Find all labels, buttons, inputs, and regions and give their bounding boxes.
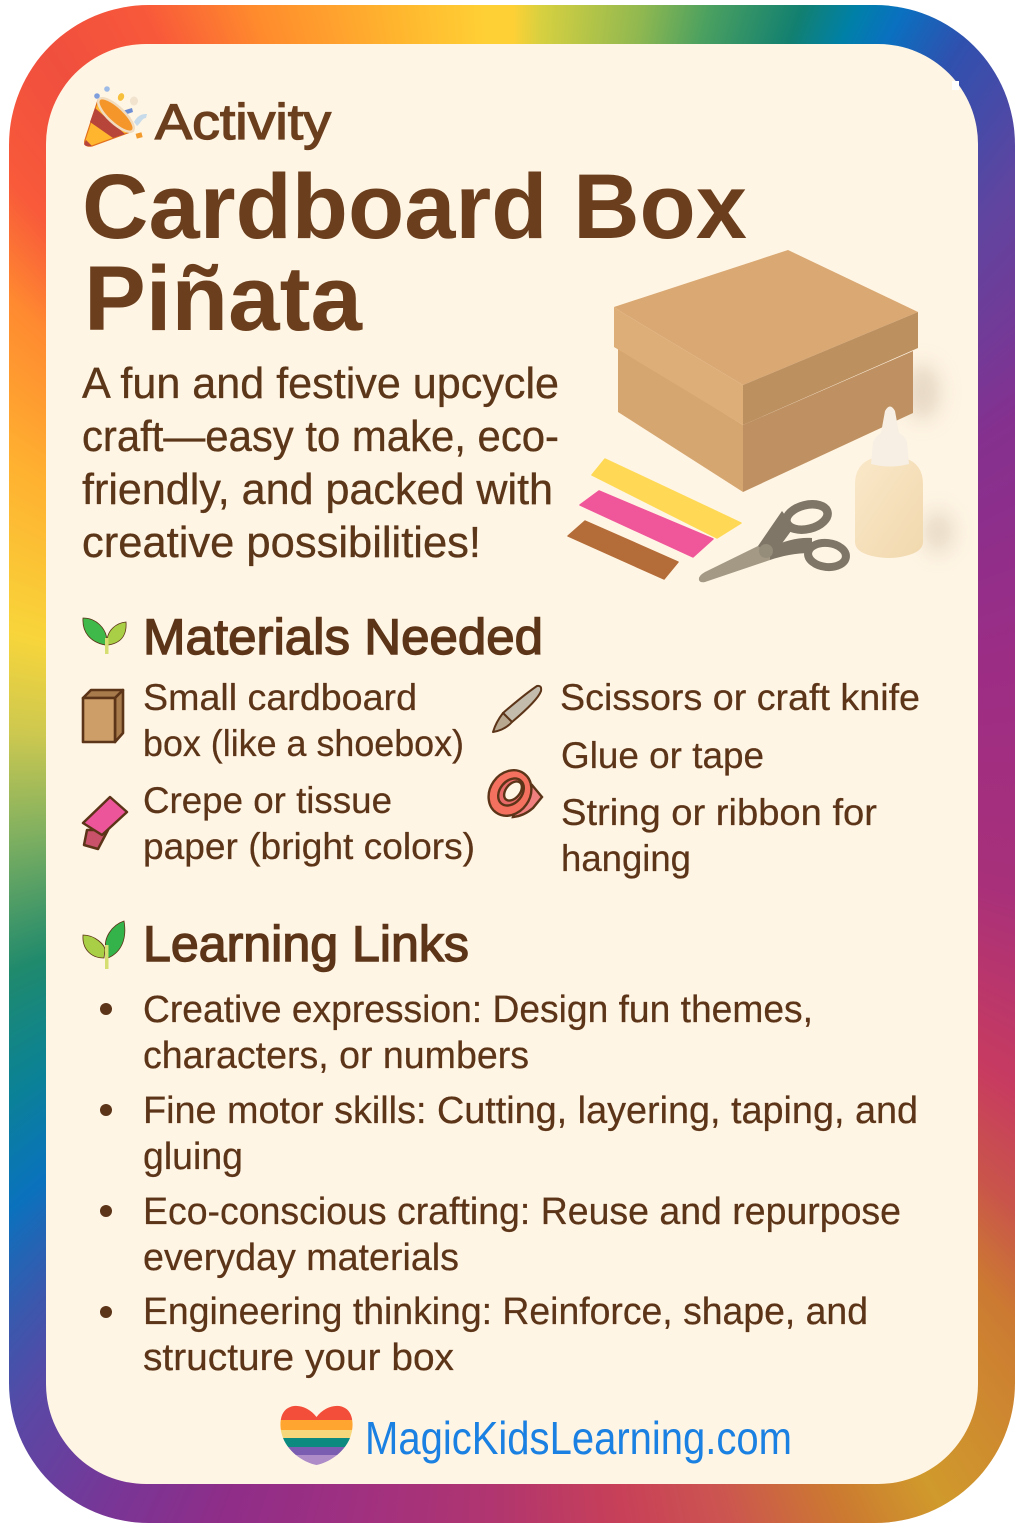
material: crepe paper text	[143, 780, 475, 867]
icon: sprout (learning)	[83, 921, 125, 969]
material: crepe paper text: Crepe or tissue	[143, 780, 392, 821]
card content	[82, 81, 959, 1465]
illustration: scissors	[699, 500, 847, 582]
materials: right column text: String or ribbon for	[561, 792, 877, 833]
icon: crepe paper	[83, 797, 127, 849]
icon: party popper	[84, 86, 147, 146]
learning links list	[100, 989, 918, 1379]
bullet: engineering thinking	[100, 1291, 868, 1379]
bullet: fine motor skills: gluing	[143, 1136, 243, 1178]
illustration: paper strips	[568, 459, 741, 579]
intro text	[82, 359, 559, 567]
illustration: craft supplies	[568, 250, 954, 582]
intro text: creative possibilities!	[82, 518, 481, 567]
material: cardboard box text	[143, 677, 464, 764]
icon: craft knife	[493, 686, 541, 732]
bullet: fine motor skills: Fine motor skills: Cutting, layering, taping, and	[143, 1090, 918, 1132]
label: Activity: Activity	[155, 94, 331, 150]
material: cardboard box text: Small cardboard	[143, 677, 417, 718]
box shadow	[904, 364, 940, 420]
heading: Learning Links: Learning Links	[143, 916, 469, 972]
icon: tape roll	[480, 762, 542, 824]
title	[82, 156, 747, 350]
material: crepe paper text: paper (bright colors)	[143, 826, 475, 867]
bullet: engineering thinking: structure your box	[143, 1337, 454, 1379]
icon: rainbow heart	[280, 1406, 353, 1465]
materials: right column text	[560, 677, 920, 879]
bullet: creative expression	[100, 989, 813, 1077]
bullet: fine motor skills	[100, 1090, 918, 1178]
heading: Materials Needed: Materials Needed	[143, 609, 543, 665]
bullet: eco-conscious crafting: Eco-conscious crafting: Reuse and repurpose	[143, 1191, 901, 1233]
bullet: creative expression: Creative expression: Design fun themes,	[143, 989, 813, 1031]
material: cardboard box text: box (like a shoebox)	[143, 723, 464, 764]
intro text: friendly, and packed with	[82, 465, 553, 514]
icon: sprout (materials)	[83, 618, 126, 654]
illustration: cardboard box	[614, 250, 918, 492]
bullet: eco-conscious crafting	[100, 1191, 901, 1279]
title: Piñata	[84, 248, 363, 350]
materials: right column text: Scissors or craft knife	[560, 677, 920, 718]
illustration: glue bottle	[855, 406, 954, 558]
title: Cardboard Box	[82, 156, 747, 258]
footer: website: MagicKidsLearning.com	[365, 1412, 792, 1464]
materials: right column text: Glue or tape	[561, 735, 764, 776]
materials: right column text: hanging	[561, 838, 691, 879]
intro text: craft—easy to make, eco-	[82, 412, 559, 461]
icon: cardboard box	[83, 690, 123, 742]
intro text: A fun and festive upcycle	[82, 359, 559, 408]
bullet: engineering thinking: Engineering thinking: Reinforce, shape, and	[143, 1291, 868, 1333]
bullet: eco-conscious crafting: everyday materials	[143, 1237, 459, 1279]
bullet: creative expression: characters, or numbers	[143, 1035, 529, 1077]
